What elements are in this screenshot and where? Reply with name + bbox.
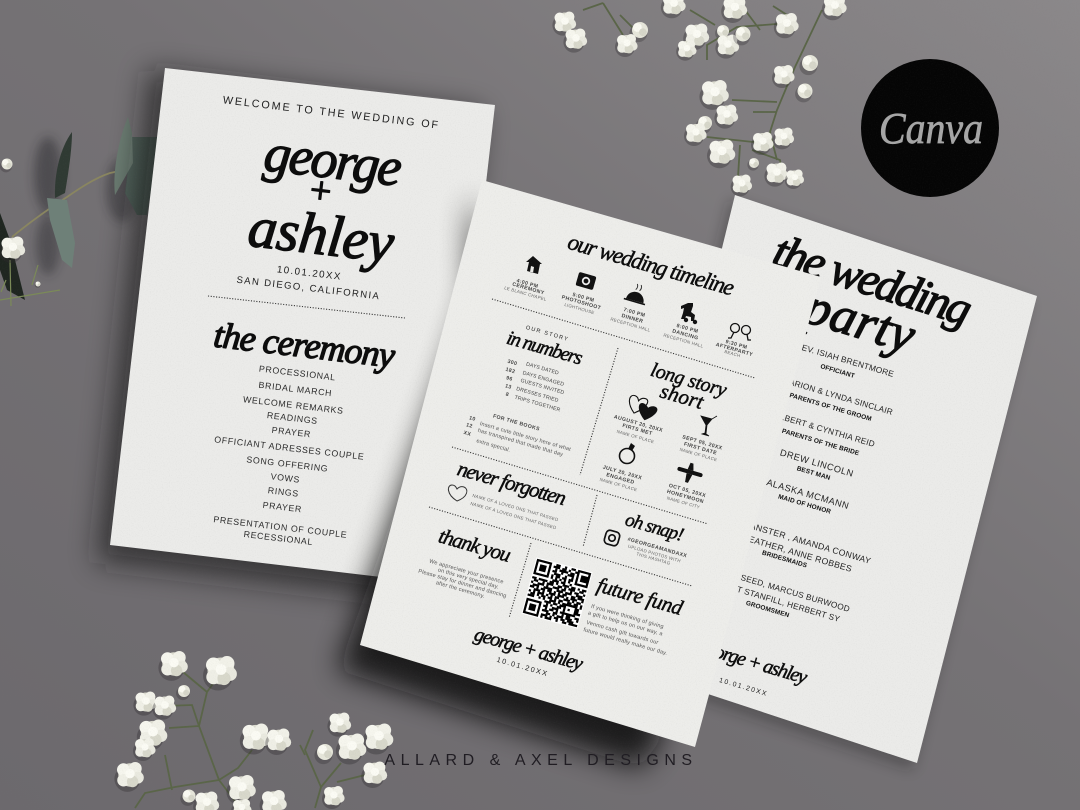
- ceremony order list: READINGS: [266, 410, 318, 426]
- section: in numbers: OUR STORY: [525, 325, 570, 343]
- section: thank you: thank you: [436, 524, 514, 567]
- section: oh snap: [603, 509, 688, 566]
- section: for the books: XX: [463, 430, 472, 438]
- wedding party names: REV. ISIAH BRENTMORE: [795, 340, 896, 379]
- section: for the books: FOR THE BOOKS: [492, 413, 541, 433]
- section: never forgotten: [448, 456, 569, 530]
- section: oh snap: UPLOAD PHOTOS WITH: [627, 544, 681, 563]
- icon: dancing figure: [681, 303, 697, 324]
- date and place: 10.01.20XX: [276, 264, 342, 283]
- foliage: eucalyptus branch at left: [0, 117, 157, 306]
- section: long story short: NAME OF PLACE: [679, 447, 718, 462]
- ceremony order list: PROCESSIONAL: [258, 364, 336, 382]
- section: long story short: OCT 05, 20XX: [668, 483, 707, 499]
- icon: church: [526, 256, 542, 274]
- wedding party names: JENNA LANSTER , AMANDA CONWAY: [713, 510, 872, 566]
- icon: ring: [620, 443, 635, 464]
- wedding party names: DREW LINCOLN: [779, 447, 855, 479]
- section: for the books: extra special.: [476, 438, 511, 454]
- icon: instagram: [603, 529, 621, 547]
- timeline schedule labels: AFTERPARTY: [715, 342, 754, 358]
- heading: the ceremony: the ceremony: [212, 315, 397, 376]
- section: long story short: [599, 359, 729, 510]
- section: in numbers: TRIPS TOGETHER: [514, 395, 561, 413]
- section: in numbers: 300: [507, 359, 518, 367]
- timeline schedule labels: 4:00 PM: [516, 278, 539, 290]
- wedding party names: MARION & LYNDA SINCLAIR: [781, 375, 894, 417]
- timeline schedule labels: RECEPTION HALL: [610, 316, 651, 333]
- ceremony order list: VOWS: [270, 471, 301, 485]
- wedding party names: MATT STANFILL, HERBERT SY: [719, 579, 842, 624]
- heading: the wedding party: party: [794, 276, 923, 365]
- section: in numbers: GUESTS INVITED: [520, 378, 565, 396]
- timeline schedule labels: RECEPTION HALL: [663, 332, 704, 349]
- section: never forgotten: NAME OF A LOVED ONE THAT PASSED: [472, 493, 559, 522]
- section: in numbers: [504, 325, 585, 413]
- sprig: baby's breath bottom left: [114, 651, 393, 810]
- heading: couple names: ashley: [245, 194, 398, 275]
- section: oh snap: oh snap!: [623, 509, 686, 546]
- card shadow: timeline: [338, 195, 664, 768]
- ceremony order list: [213, 364, 365, 547]
- QR code: [521, 557, 593, 629]
- heading: our wedding timeline: our wedding timeline: [565, 229, 737, 301]
- timeline schedule labels: 9:30 PM: [725, 339, 748, 351]
- section: future fund: a gift to help us on our way, a: [587, 610, 664, 638]
- section: thank you: Please stay for dinner and dancing: [417, 569, 507, 600]
- section: thank you: on this very special day.: [437, 567, 500, 591]
- timeline schedule labels: 5:00 PM: [572, 292, 595, 304]
- timeline schedule labels: 7:00 PM: [623, 307, 646, 319]
- timeline schedule labels: LE BLANC CHAPEL: [504, 285, 547, 302]
- timeline schedule labels: BEACH: [724, 349, 741, 358]
- section: in numbers: 13: [504, 383, 512, 391]
- section: future fund: future would really make our day.: [583, 627, 668, 657]
- section: long story short: long story: [648, 359, 729, 402]
- section: long story short: JULY 20, 20XX: [602, 465, 643, 482]
- section: for the books: [463, 413, 572, 458]
- ceremony order list: PRAYER: [262, 500, 303, 514]
- section: thank you: We appreciate your presence: [428, 559, 504, 586]
- heading: the wedding party: the wedding: [767, 225, 978, 336]
- timeline schedule labels: DINNER: [621, 313, 644, 325]
- section: in numbers: DRESSES TRIED: [515, 386, 559, 404]
- wedding party names: JOHN SEED, MARCUS BURWOOD: [715, 565, 851, 614]
- section: never forgotten: never forgotten: [455, 456, 569, 510]
- section: in numbers: 96: [505, 375, 513, 383]
- panel: ceremony program card: [110, 68, 495, 584]
- badge: Canva logo: [861, 59, 999, 197]
- wedding party names: ALBERT & CYNTHIA REID: [773, 410, 876, 449]
- section: oh snap: THIS HASHTAG: [636, 551, 671, 566]
- card shadow: ceremony: [96, 70, 482, 602]
- wedding party names: PARENTS OF THE BRIDE: [781, 428, 860, 457]
- section: long story short: SEPT 05, 20XX: [681, 434, 723, 452]
- panel: wedding party card: [620, 195, 1037, 763]
- wedding party names: ALASKA MCMANN: [765, 477, 850, 511]
- panel: timeline card: [360, 180, 821, 747]
- icon: camera: [575, 272, 597, 290]
- timeline schedule labels: PHOTOSHOOT: [561, 295, 602, 312]
- icon: airplane: [674, 460, 705, 486]
- heading: couple names: [245, 122, 405, 275]
- icon: champagne glasses: [728, 324, 751, 340]
- sprig: baby's breath top right: [552, 0, 847, 196]
- section: future fund: [583, 573, 686, 657]
- section: for the books: 12: [465, 422, 473, 430]
- wedding party names: PARENTS OF THE GROOM: [789, 392, 872, 423]
- section: thank you: after the ceremony.: [435, 580, 486, 600]
- ceremony order list: PRAYER: [271, 425, 312, 439]
- icon: two hearts: [625, 394, 660, 423]
- signature: 10.01.20XX: [718, 677, 769, 698]
- credit: designer name: ALLARD & AXEL DESIGNS: [384, 752, 698, 769]
- icon: dinner cloche: [624, 281, 650, 305]
- ceremony order list: PRESENTATION OF COUPLE: [213, 514, 348, 540]
- section: for the books: 10: [468, 415, 476, 423]
- ceremony order list: WELCOME REMARKS: [243, 394, 344, 416]
- section: long story short: AUGUST 20, 20XX: [613, 414, 664, 434]
- timeline schedule labels: [504, 278, 754, 358]
- section: future fund: If you were thinking of giving: [590, 604, 664, 630]
- section: long story short: NAME OF PLACE: [599, 477, 638, 492]
- section: long story short: ENGAGED: [605, 472, 635, 486]
- heading: couple names: george: [261, 122, 405, 198]
- wedding party names: BEST MAN: [796, 465, 831, 482]
- signature: george + ashley: [472, 623, 586, 675]
- section: thank you: [417, 524, 514, 600]
- section: for the books: Insert a cute little story here of what: [479, 421, 572, 453]
- timeline schedule labels: 8:00 PM: [676, 323, 699, 335]
- heading: couple names: +: [305, 169, 336, 213]
- wedding party names: MAID OF HONOR: [777, 493, 832, 516]
- ceremony order list: RINGS: [267, 485, 299, 499]
- section: long story short: FIRTS MET: [622, 423, 653, 437]
- section: future fund: Venmo cash gift towards our: [585, 620, 659, 646]
- section: in numbers: in numbers: [504, 327, 585, 370]
- section: future fund: future fund: [594, 573, 686, 620]
- section: never forgotten: NAME OF A LOVED ONE THAT PASSED: [470, 501, 557, 530]
- section: long story short: HONEYMOON: [666, 489, 704, 505]
- wedding party names: MARY FAIRWEATHER, ANNE ROBBES: [692, 517, 853, 574]
- ceremony order list: BRIDAL MARCH: [258, 380, 333, 398]
- section: in numbers: DAYS ENGAGED: [522, 370, 565, 388]
- section: in numbers: 182: [505, 367, 516, 375]
- ceremony order list: SONG OFFERING: [246, 454, 329, 474]
- section: long story short: NAME OF PLACE: [616, 429, 655, 444]
- timeline schedule labels: DANCING: [671, 328, 699, 342]
- card shadow: wedding party: [615, 200, 1030, 770]
- section: long story short: short: [657, 379, 707, 414]
- signature: 10.01.20XX: [496, 655, 550, 678]
- ceremony order list: OFFICIANT ADRESSES COUPLE: [214, 434, 365, 462]
- wedding party names: OFFICIANT: [819, 363, 855, 380]
- signature: george + ashley: [696, 636, 810, 689]
- badge: Canva logo: Canva: [879, 104, 983, 153]
- date and place: SAN DIEGO, CALIFORNIA: [236, 275, 381, 302]
- wedding party names: BRIDESMAIDS: [761, 550, 808, 570]
- section: in numbers: DAYS DATED: [525, 361, 559, 377]
- section: long story short: NAME OF CITY: [666, 495, 701, 510]
- section: for the books: has transpired that made that day: [477, 428, 564, 458]
- wedding party names: GROOMSMEN: [745, 600, 790, 619]
- section: long story short: FIRST DATE: [683, 441, 718, 457]
- ceremony order list: RECESSIONAL: [243, 529, 314, 547]
- timeline schedule labels: CEREMONY: [511, 282, 545, 297]
- icon: cocktail: [701, 416, 717, 436]
- timeline schedule labels: LIGHTHOUSE: [564, 302, 595, 315]
- wedding party names: [692, 340, 896, 624]
- section: oh snap: #GEORGEAMANDAXX: [627, 537, 688, 559]
- icon: heart outline: [448, 485, 467, 501]
- section: in numbers: 8: [505, 392, 510, 398]
- heading: welcome line: WELCOME TO THE WEDDING OF: [222, 94, 441, 132]
